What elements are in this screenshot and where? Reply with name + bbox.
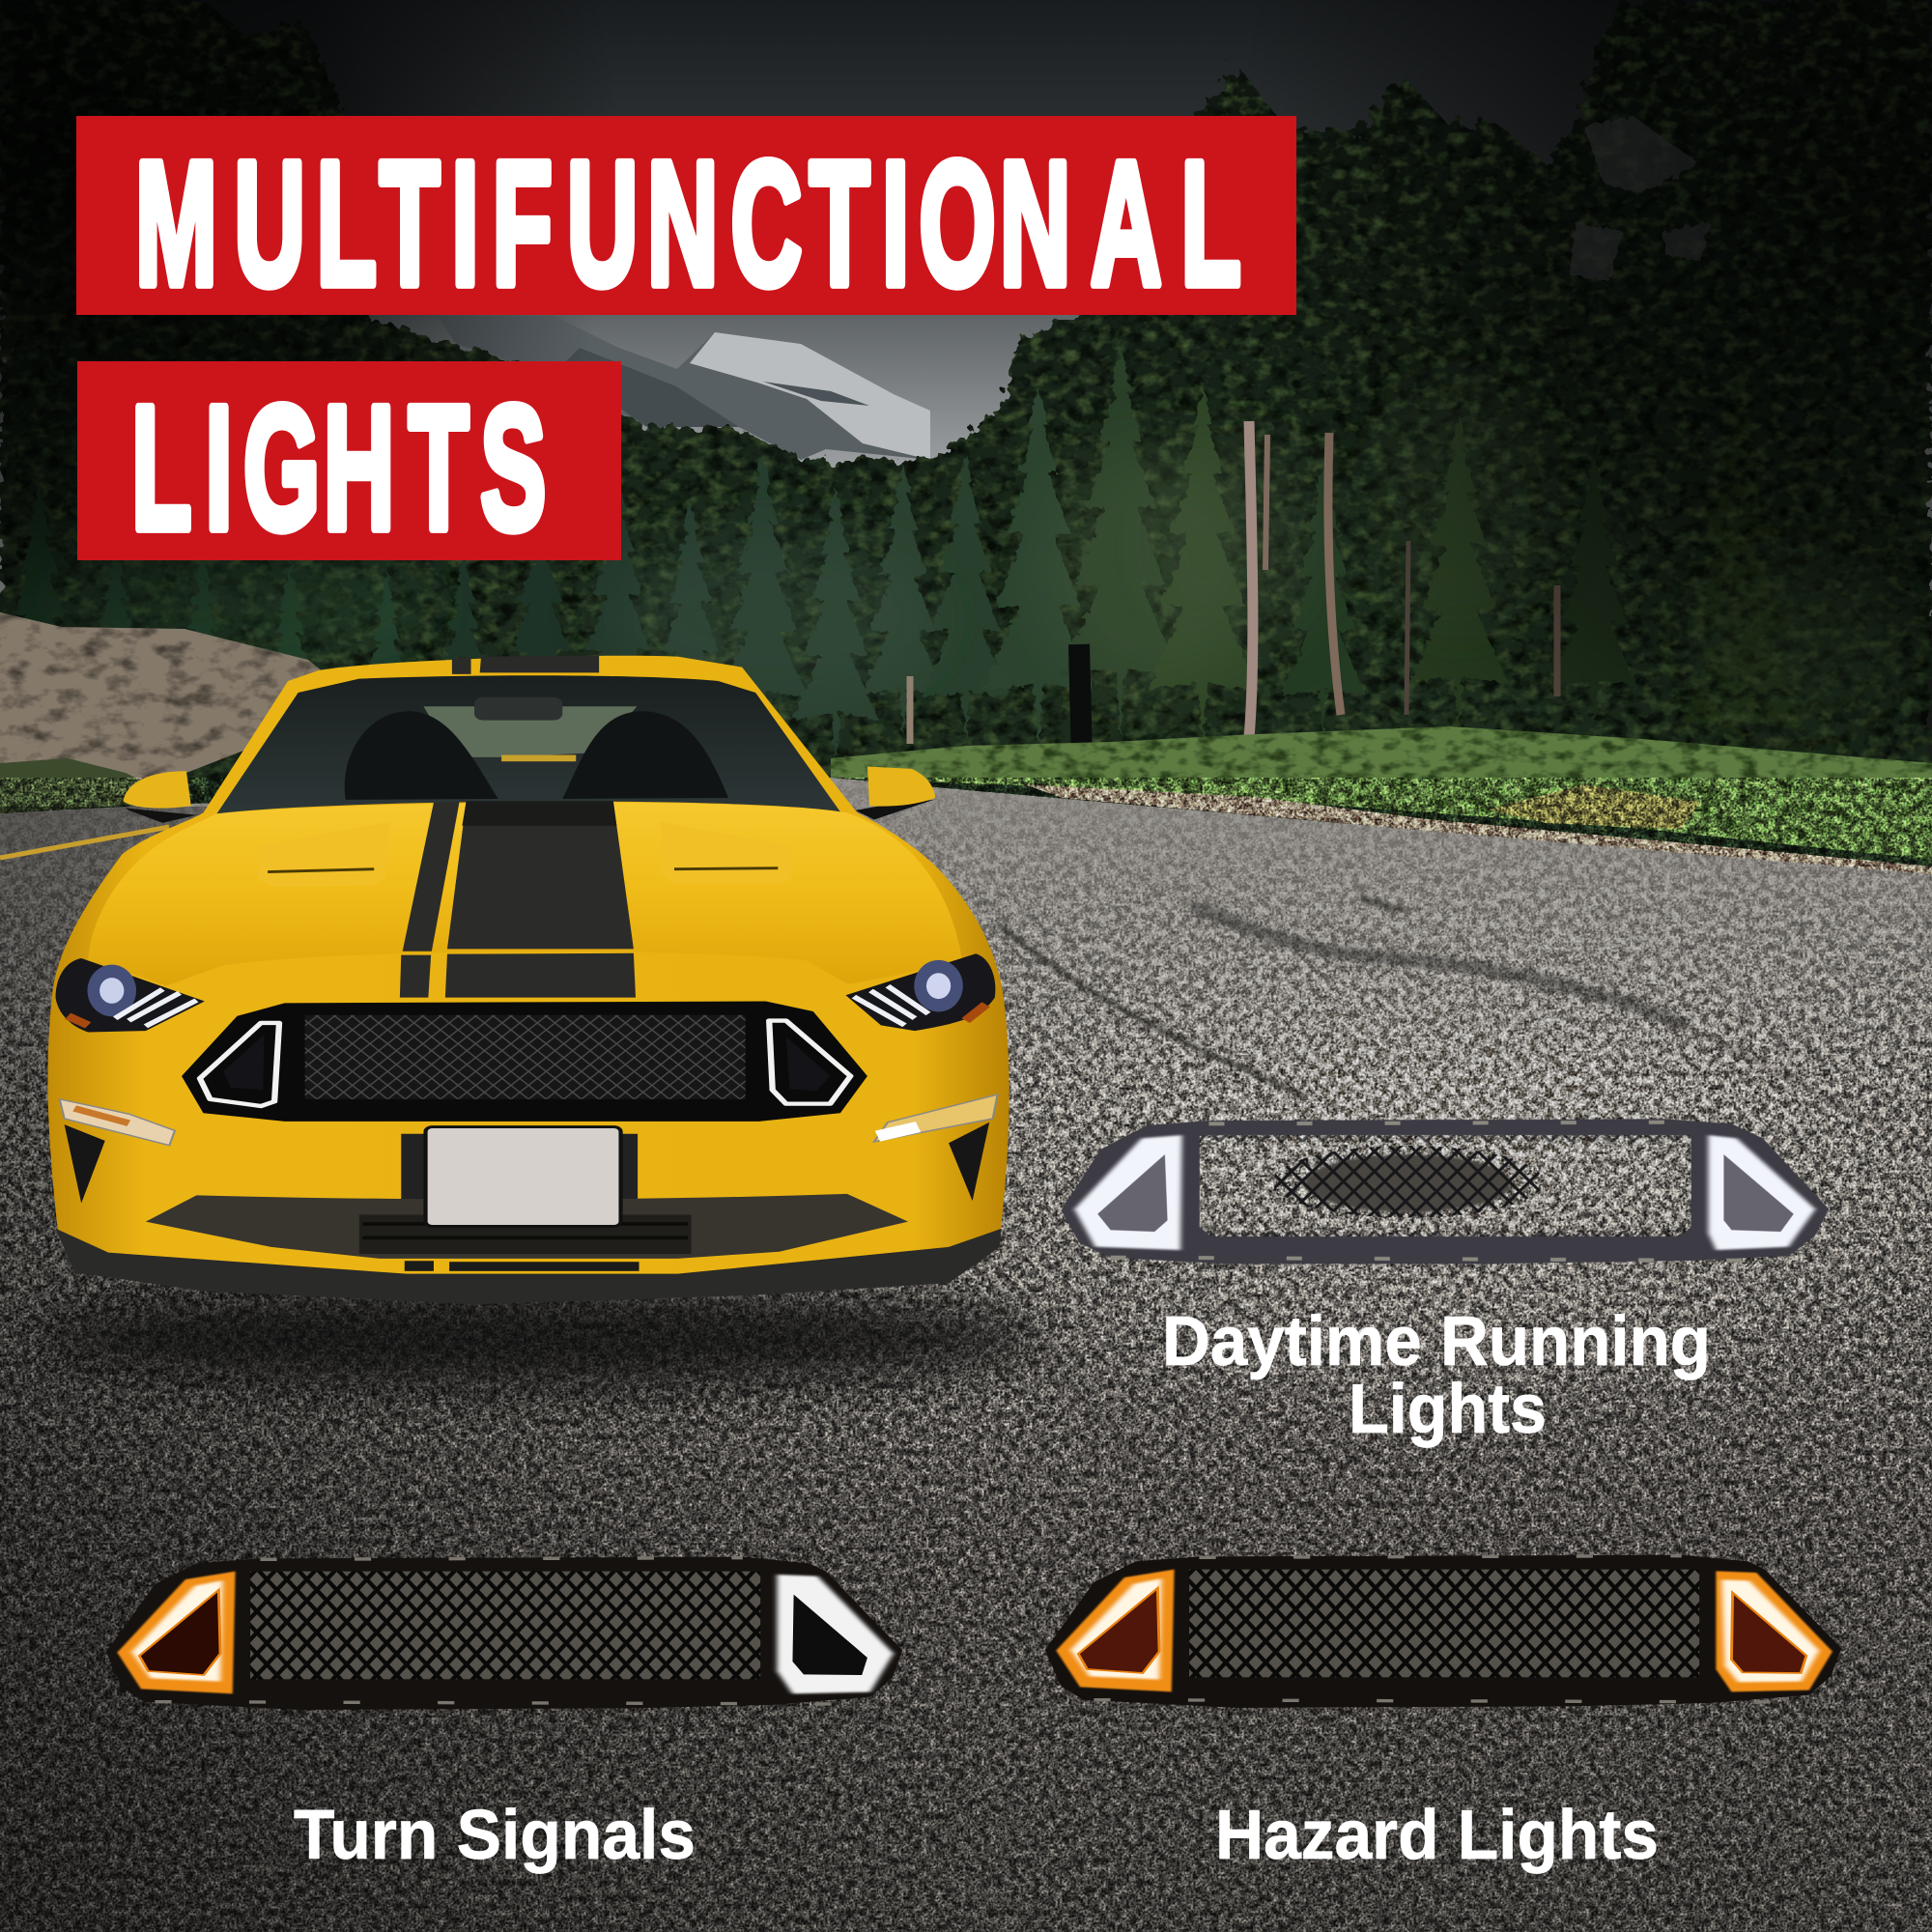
hood scoop right [661,822,791,884]
view through windshield [423,706,637,757]
turn signal mesh [250,1572,760,1679]
daytime frame [1062,1119,1829,1264]
title banner: LIGHTS: LIGHTS [131,370,546,566]
hood [88,803,962,986]
hazard left lamp [1056,1570,1175,1691]
left grille light [200,1023,279,1106]
conifer silhouettes [6,348,1636,763]
label: daytime running lights: Lights [1349,1371,1547,1448]
road centre line [0,827,169,858]
turn signal frame clips [155,1558,854,1704]
background: forest [0,0,1932,869]
right grille light [769,1021,850,1104]
lower intake [146,1194,908,1259]
car shadow [39,1288,1043,1388]
windshield [216,675,840,813]
label: daytime running lights: Daytime Running [1162,1303,1711,1380]
road crack marks [998,898,1932,1555]
sky gaps in right trees [1570,116,1710,280]
front lip [56,1229,1002,1304]
background: rock wall [0,612,328,813]
hazard mesh [1189,1570,1699,1677]
grille: turn signals [106,1557,902,1710]
corner vignette left [0,0,618,744]
car body [47,656,1009,1293]
right headlight [845,953,995,1031]
daytime frame clips [1111,1122,1778,1261]
bumper stripes [405,1261,639,1271]
tree trunks [910,421,1557,761]
label: turn signals: Turn Signals [294,1797,696,1874]
background: roadside grass [831,726,1932,881]
licence plate [426,1127,621,1226]
grille surround [182,1001,867,1122]
left fog light [60,1099,175,1146]
right fog light [874,1094,998,1142]
daytime right lamp [1708,1135,1815,1250]
corner vignette right [1236,0,1932,879]
stripe shading [462,801,616,826]
seats and interior [345,697,728,800]
title banner: MULTIFUNCTIONAL: MULTIFUNCTIONAL [135,126,1241,322]
background: road [0,778,1932,1932]
hood stripes [400,801,636,998]
left headlight [56,958,205,1033]
hazard frame [1045,1555,1841,1708]
car: yellow Mustang front view [47,656,1009,1304]
hood scoop left [258,822,389,887]
right mirror [855,766,935,819]
label: hazard lights: Hazard Lights [1215,1797,1659,1874]
background: sky [0,0,1932,618]
light foliage highlights [48,377,1903,724]
side vents [65,1122,989,1203]
label: daytime running lights [1162,1303,1711,1448]
hazard frame clips [1094,1556,1793,1702]
grille: hazard lights [1045,1555,1841,1708]
forest mass [0,0,1932,869]
roof stripes [452,656,599,674]
turn signal amber lamp [117,1572,236,1693]
intake grille [359,1214,692,1254]
left mirror [124,771,196,823]
background: mountain [438,316,930,460]
turn signal frame [106,1557,902,1710]
turn signal white lamp [777,1575,894,1693]
grille mesh [305,1015,746,1099]
daytime left lamp [1074,1135,1182,1250]
grille: daytime running lights [1062,1119,1829,1264]
lower stripes beside plate [401,1134,638,1201]
hazard right lamp [1716,1571,1833,1691]
mesh behind daytime grille [1200,1135,1691,1240]
